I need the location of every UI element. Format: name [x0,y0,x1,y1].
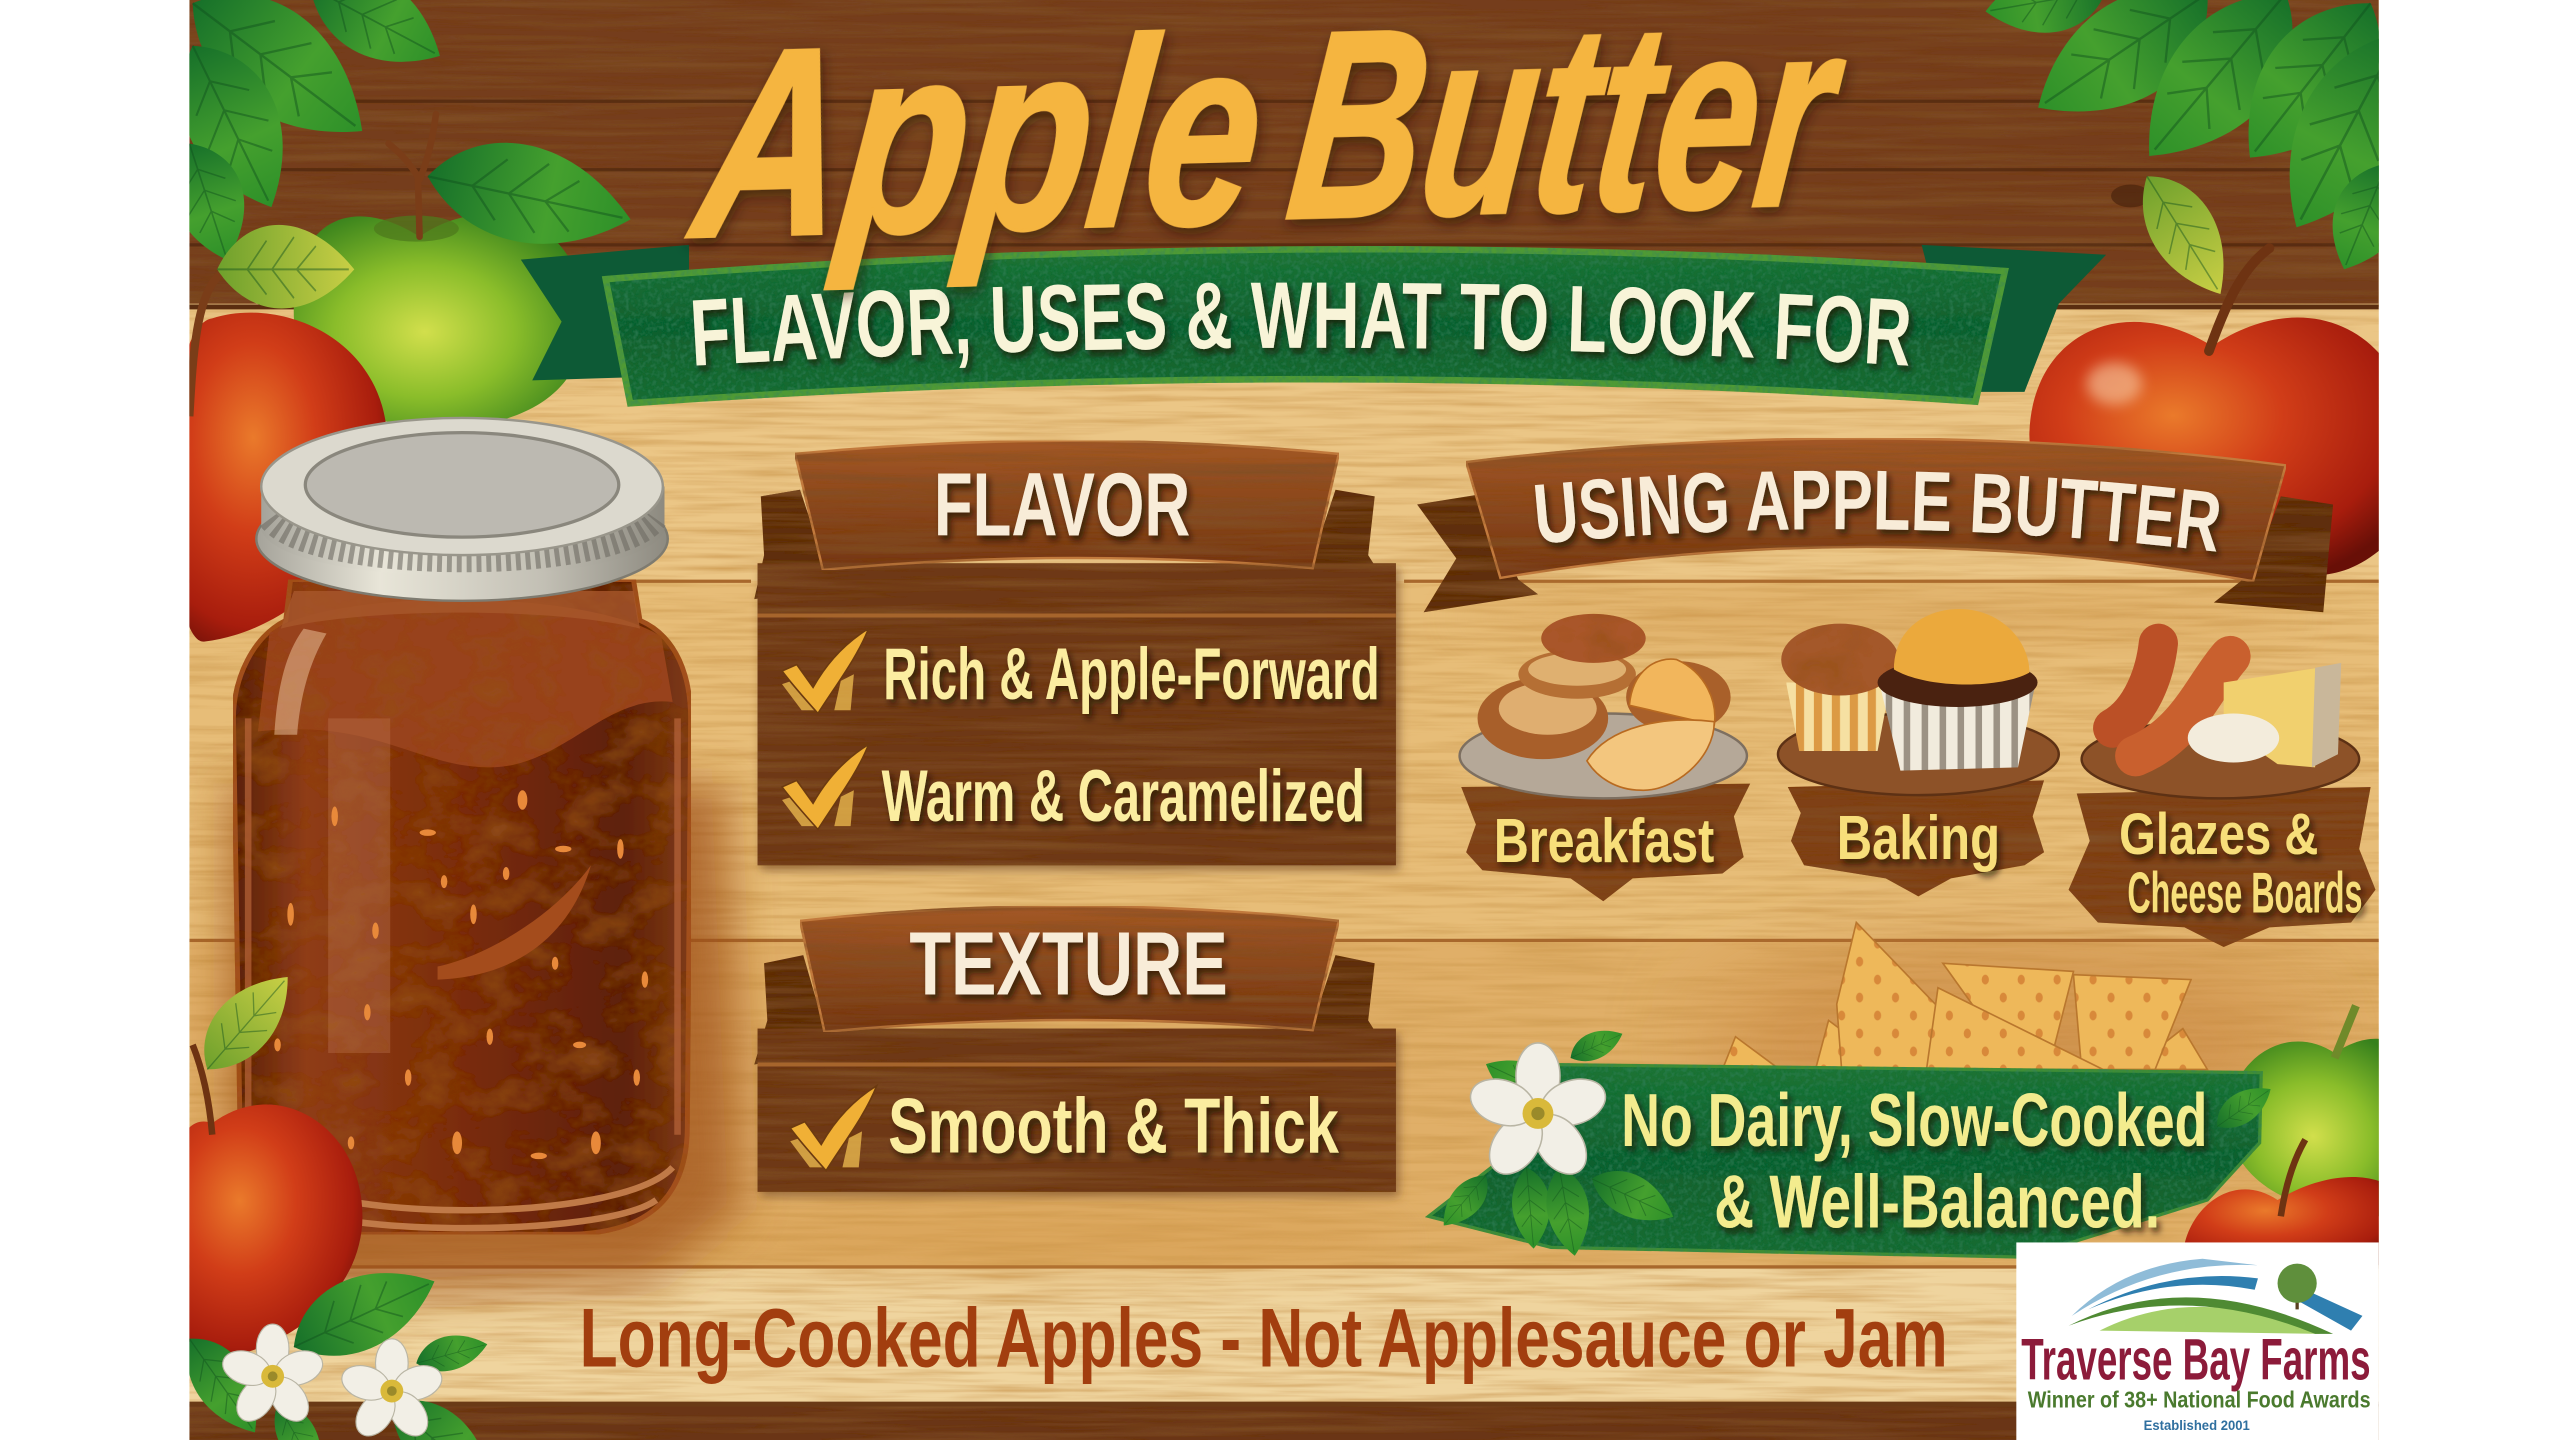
flavor board [758,563,1396,865]
red apple top right [2029,176,2379,574]
texture heading plank [800,906,1339,1032]
flowers bottom left [189,1273,488,1440]
heading plank [1466,438,2286,581]
check icon [790,1086,877,1171]
texture heading ribbon tails [754,955,1396,1064]
check icon [782,744,869,829]
panel: flavor [754,441,1396,865]
bottom tagline: Long-Cooked Apples - Not Applesauce or Jam [580,1292,1948,1385]
title [677,0,1857,296]
banner text line 1: No Dairy, Slow-Cooked [1621,1078,2207,1162]
red apple top left [171,274,387,642]
jar shadow [229,784,743,1298]
heading ribbon tails [1417,495,2333,612]
flavor heading: FLAVOR [934,456,1190,556]
food: baking [1778,609,2059,896]
texture item: Smooth & Thick [888,1082,1339,1170]
logo established: Established 2001 [2144,1417,2250,1433]
top left leaves [189,0,440,258]
apples bottom right [2183,1006,2416,1265]
banner text line 2: & Well-Balanced. [1714,1160,2160,1244]
flavor item 2: Warm & Caramelized [882,754,1365,837]
jar lid [256,418,668,601]
subtitle text: FLAVOR, USES & WHAT TO LOOK FOR [692,282,1916,376]
flavor heading plank [795,441,1339,570]
label: Cheese Boards [2127,862,2362,926]
green apple top left [217,114,641,428]
food: glazes and cheese boards [2069,643,2376,947]
label: Breakfast [1494,807,1714,876]
flower [1464,1043,1611,1184]
green banner: no dairy [1429,1021,2279,1259]
apple bottom left [189,977,362,1352]
panel: texture [754,906,1396,1192]
texture heading: TEXTURE [909,914,1228,1014]
label: Baking [1837,804,2000,873]
flavor heading ribbon tails [754,490,1396,599]
logo: traverse bay farms [2016,1242,2379,1440]
panel: using apple butter [1417,398,2376,947]
jar of apple butter [233,418,691,1234]
check icon [782,629,869,713]
subtitle ribbon [520,244,2106,407]
flavor item 1: Rich & Apple-Forward [883,632,1380,715]
top right leaves [1986,0,2379,270]
texture board [758,1029,1396,1192]
crackers [1722,922,2207,1069]
logo awards: Winner of 38+ National Food Awards [2028,1386,2371,1412]
heading text: USING APPLE BUTTER [1534,470,2226,560]
food: breakfast [1460,614,1750,901]
label: Glazes & [2119,802,2318,867]
